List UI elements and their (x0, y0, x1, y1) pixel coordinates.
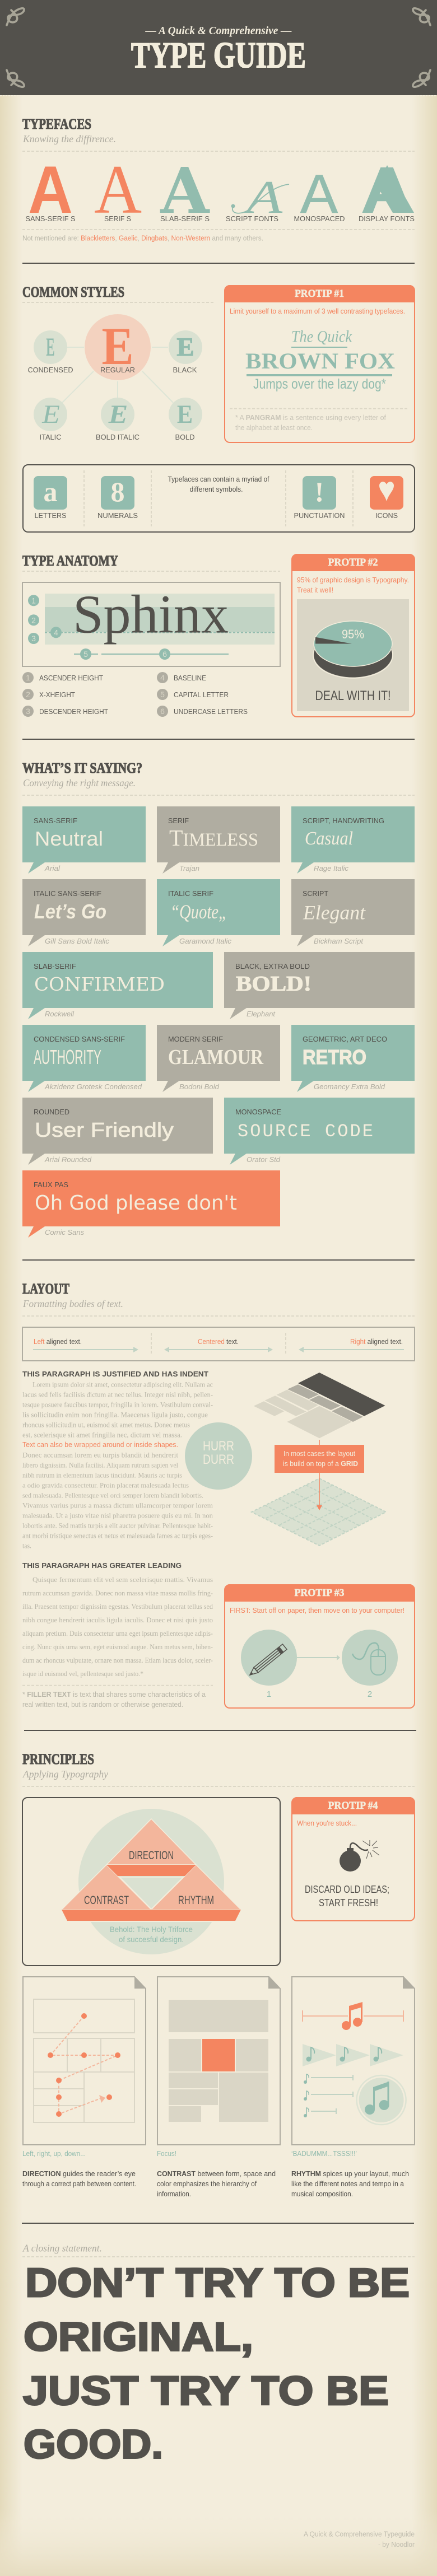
icon: mouse (342, 1630, 398, 1686)
eye path (48, 2013, 120, 2117)
protip 4 message (305, 1884, 389, 1908)
card: timeless: SERIF (168, 816, 189, 825)
protip 3 title: PROTIP #3 (295, 1587, 344, 1599)
card: neutral: SANS-SERIF (34, 816, 77, 825)
typeface labels: SERIF S (104, 214, 131, 223)
card: user friendly: User Friendly (35, 1118, 174, 1141)
style: bold italic (96, 398, 140, 441)
subheading: formatting bodies of text: Formatting bodies of text. (22, 1298, 123, 1309)
header subtitle: — A Quick & Comprehensive — (145, 25, 291, 37)
style: bold: E (177, 399, 193, 429)
style: italic: E (41, 399, 60, 428)
symbols description: different symbols. (189, 485, 243, 493)
letter samples row (28, 151, 414, 230)
page captions: Focus! (157, 2149, 176, 2158)
anatomy legend: 3 (26, 707, 30, 716)
filler text note: real written text, but is random or otherwise generated. (22, 1700, 183, 1709)
pangram lockup: Jumps over the lazy dog* (253, 376, 386, 392)
panel: protip 4 (292, 1797, 415, 1921)
card: user friendly: Arial Rounded (44, 1155, 92, 1164)
sphinx diagram: 1 (31, 596, 36, 605)
card: source code: MONOSPACE (235, 1108, 281, 1116)
card: authority: CONDENSED SANS-SERIF (34, 1035, 125, 1043)
protip 1 text: Limit yourself to a maximum of 3 well contrasting typefaces. (230, 307, 405, 315)
alignment panel: Centered text. (198, 1337, 239, 1346)
text: rhythm: musical composition. (291, 2190, 353, 2198)
protip 2 text: 95% of graphic design is Typography. (297, 576, 409, 584)
step numbers: 2 (368, 1690, 372, 1699)
symbol: icons (370, 476, 403, 520)
justified paragraph: malesuada. Ut a justo vitae nisl pharetra posuere quis eu mi. In non (22, 1511, 213, 1520)
pie chart card: 95% (342, 627, 364, 641)
greater leading paragraph: dum ac rhoncus vulputate, ornare non massa. Etiam lacus dolor, sceler- (22, 1656, 213, 1664)
symbol: punctuation: ! (315, 476, 324, 507)
anatomy legend: BASELINE (174, 674, 206, 682)
symbol: punctuation: PUNCTUATION (294, 511, 345, 520)
callout: grid (275, 1445, 364, 1473)
symbols description: Typefaces can contain a myriad of (168, 475, 269, 483)
triforce caption: of succesful design. (119, 1935, 184, 1944)
justified paragraph: libero dignissim. Nulla facilisi. Aliquam rutrum sapien vel (22, 1461, 178, 1469)
header banner (0, 0, 437, 96)
heading: typefaces: TYPEFACES (22, 116, 91, 132)
footer credit: - by Noodlor (378, 2541, 415, 2549)
card: let's go: Gill Sans Bold Italic (45, 937, 110, 945)
symbol: letters: LETTERS (35, 511, 67, 520)
closing quote: ORIGINAL, (24, 2315, 253, 2360)
symbol: icons: ICONS (375, 511, 398, 520)
style: regular (85, 314, 151, 380)
triforce labels: RHYTHM (178, 1894, 214, 1907)
card: casual: Rage Italic (314, 864, 349, 872)
card: elegant: SCRIPT (303, 889, 328, 898)
symbol: punctuation (294, 476, 345, 520)
arrow: paper to computer (297, 1655, 340, 1660)
style: black (169, 330, 202, 374)
style: bold italic: E (108, 399, 128, 428)
subheading: applying typography: Applying Typography (22, 1768, 108, 1780)
justified paragraph: est, scelerisque sit amet fringilla nec, dictum vel massa. (22, 1431, 182, 1439)
page captions (22, 2149, 357, 2158)
card: bold: Elephant (247, 1010, 276, 1018)
heading: type anatomy: TYPE ANATOMY (22, 553, 118, 569)
symbol: letters: a (44, 476, 57, 507)
typeface labels: SLAB-SERIF S (160, 214, 210, 223)
style: italic: ITALIC (39, 433, 62, 441)
greater leading paragraph: aliquam pretium. Duis consectetur urna eget ipsum pellentesque adipis- (22, 1629, 213, 1637)
style: black: E (176, 333, 194, 362)
page: direction (23, 1977, 146, 2145)
justified paragraph: tas. (22, 1542, 31, 1550)
symbol: numerals: 8 (111, 476, 124, 507)
style: italic (34, 398, 67, 441)
pangram lockup: BROWN FOX (245, 348, 395, 374)
alignment panel: Left aligned text. (34, 1337, 82, 1346)
text: rhythm (291, 2169, 409, 2198)
card: casual: Casual (305, 828, 353, 849)
justified paragraph: Lorem ipsum dolor sit amet, consectetur adipiscing elit. Nullam ac (32, 1380, 213, 1389)
protip 4 message: START FRESH! (319, 1897, 378, 1908)
justified paragraph: rhoncus sollicitudin ut, euismod sit amet metus. Donec metus (22, 1421, 190, 1429)
anatomy legend: 4 (160, 673, 165, 682)
style: black: BLACK (173, 366, 197, 374)
justified paragraph: tesque posuere faucibus tempor, fringilla in lorem. Vestibulum conval- (22, 1401, 213, 1409)
note durations (304, 2074, 353, 2117)
filler text note: * FILLER TEXT is text that shares some characteristics of a (22, 1690, 206, 1698)
pangram note (235, 414, 387, 432)
alignment panel (22, 1327, 415, 1361)
anatomy legend: 2 (26, 690, 30, 699)
subheading: conveying the right message: Conveying the right message. (23, 777, 136, 788)
typeface labels: SCRIPT FONTS (226, 214, 278, 223)
card: let's go: ITALIC SANS-SERIF (34, 889, 101, 898)
card: faux pas: Oh God please don't (35, 1192, 237, 1215)
style: bold (169, 398, 202, 441)
style: regular: REGULAR (100, 366, 135, 374)
style: condensed: CONDENSED (28, 366, 73, 374)
page captions: Left, right, up, down... (22, 2149, 86, 2158)
card: elegant: Bickham Script (314, 937, 364, 945)
justified paragraph (22, 1370, 213, 1550)
triforce labels: DIRECTION (129, 1849, 174, 1862)
triforce labels (84, 1849, 214, 1907)
protip 3 text: FIRST: Start off on paper, then move on to your computer! (230, 1607, 405, 1614)
letter samples row: A (28, 153, 73, 227)
card: bold: BLACK, EXTRA BOLD (235, 962, 310, 970)
card: elegant: Elegant (303, 902, 366, 924)
triforce caption (110, 1925, 193, 1944)
triforce labels: CONTRAST (84, 1894, 129, 1907)
pie chart card (297, 599, 409, 711)
step numbers: 1 (267, 1690, 271, 1699)
justified paragraph: Donec accumsan lorem eu turpis blandit id hendrerit (22, 1451, 178, 1459)
card: confirmed: Rockwell (45, 1010, 75, 1018)
protip 4 text: When you're stuck... (297, 1819, 357, 1827)
heading: principles: PRINCIPLES (22, 1751, 94, 1767)
sphinx diagram (22, 582, 280, 666)
typeface labels: MONOSPACED (294, 214, 345, 223)
card: retro: Geomancy Extra Bold (314, 1082, 385, 1091)
title: TYPE GUIDE (131, 35, 306, 76)
alignment panel: Right aligned text. (350, 1337, 403, 1346)
triangle notes (303, 2044, 403, 2066)
subheading: knowing the difference: Knowing the diffirence. (22, 133, 116, 144)
card: retro: RETRO (303, 1046, 366, 1068)
card: confirmed: SLAB-SERIF (34, 962, 76, 970)
style: regular: E (101, 316, 134, 376)
card: source code (224, 1098, 415, 1165)
symbol: numerals: NUMERALS (97, 511, 138, 520)
text: direction: through a correct path between content. (22, 2180, 136, 2188)
card: quote: Garamond Italic (179, 937, 232, 945)
card: casual: SCRIPT, HANDWRITING (303, 816, 384, 825)
typeface labels: DISPLAY FONTS (359, 214, 415, 223)
callout: grid: In most cases the layout (283, 1449, 355, 1458)
triforce caption: Behold: The Holy Triforce (110, 1925, 193, 1934)
card: bold (224, 952, 415, 1019)
card: confirmed: CONFIRMED (34, 973, 165, 995)
page captions: ‘BADUMMM...TSSS!!!’ (291, 2149, 357, 2158)
beat line (303, 2010, 403, 2022)
card: glamour: MODERN SERIF (168, 1035, 223, 1043)
closing quote: DON’T TRY TO BE (25, 2261, 410, 2306)
sphinx diagram: 2 (31, 615, 36, 624)
panel: triforce (22, 1798, 280, 1966)
anatomy legend: DESCENDER HEIGHT (39, 707, 108, 716)
symbol: numerals (97, 476, 138, 520)
heading: what's it saying: WHAT’S IT SAYING? (22, 760, 142, 776)
panel: symbols (23, 465, 415, 532)
symbol: letters (34, 476, 67, 520)
justified paragraph: lobortis ante. Sed mattis turpis a elit auctor pulvinar. Pellentesque habit- (22, 1522, 213, 1530)
card: faux pas (22, 1170, 280, 1238)
card: user friendly: ROUNDED (34, 1108, 69, 1116)
text: contrast: information. (157, 2190, 191, 2198)
icon: pencil (241, 1630, 297, 1686)
card: neutral (22, 806, 146, 874)
page: contrast (157, 1977, 280, 2145)
justified paragraph: Text can also be wrapped around or inside shapes. (22, 1440, 178, 1449)
sphinx diagram: 5 (83, 650, 88, 659)
protip 2 text (297, 576, 409, 594)
letter samples row: A (160, 155, 211, 228)
greater leading paragraph: Quisque fermentum elit vel sem scelerisque mattis. Vivamus (32, 1575, 213, 1584)
greater leading paragraph: isque id euismod vel, pellentesque sed justo.* (22, 1669, 143, 1678)
justified paragraph: lacus sed felis facilisis dictum at nec tellus. Integer nisl nibh, pellen- (22, 1390, 213, 1399)
card: elegant (291, 879, 415, 946)
text: rhythm: like the different notes and tempo in a (291, 2180, 405, 2188)
circle: hurr durr: HURR (203, 1439, 234, 1454)
symbols description (168, 475, 269, 493)
pangram note: the alphabet at least once. (235, 424, 313, 432)
filler text note (22, 1690, 206, 1709)
text: rhythm: RHYTHM spices up your layout, much (291, 2169, 409, 2178)
card: authority: AUTHORITY (34, 1046, 101, 1068)
letter samples row: A (243, 171, 283, 223)
text: contrast: color emphasizes the hierarchy of (157, 2180, 257, 2188)
panel: protip 2 (292, 554, 415, 717)
justified paragraph: lis sollicitudin enim non fringilla. Maecenas ligula justo, congue (22, 1411, 208, 1419)
arrow: layout to grid (317, 1440, 322, 1510)
card: faux pas: Comic Sans (45, 1228, 84, 1236)
connector lines (62, 347, 173, 403)
justified paragraph: a odio gravida consectetur. Proin placerat malesuada lectus (22, 1481, 189, 1490)
card: let's go (22, 879, 146, 946)
card: source code: SOURCE CODE (238, 1121, 373, 1142)
card: authority: Akzidenz Grotesk Condensed (44, 1082, 142, 1091)
greater leading paragraph (22, 1561, 213, 1678)
card: authority (22, 1025, 146, 1092)
sphinx diagram: Sphinx (73, 584, 229, 645)
protip 2 text: Treat it well! (297, 586, 333, 594)
section: common styles (22, 284, 213, 441)
sphinx diagram: 6 (162, 650, 167, 659)
greater leading paragraph: rutrum accumsan gravida. Donec non massa vitae massa mollis fring- (22, 1589, 213, 1597)
card: user friendly (22, 1098, 213, 1165)
card: faux pas: FAUX PAS (34, 1180, 68, 1189)
ornament: corner flourishes (7, 8, 430, 87)
step numbers (267, 1690, 372, 1699)
justified paragraph: nibh rutrum in elementum lacus tincidunt. Mauris ac turpis (22, 1471, 182, 1480)
justified paragraph: sed malesuada. Pellentesque vel orci semper lorem blandit lobortis. (22, 1491, 203, 1500)
anatomy legend (22, 672, 248, 717)
closing quote (23, 2261, 410, 2467)
card: quote (157, 879, 280, 946)
card: neutral: Arial (44, 864, 61, 872)
greater leading paragraph: cing. Nunc quis urna sem, eget euismod augue. Nam metus sem, biben- (22, 1642, 213, 1651)
closing quote: JUST TRY TO BE (23, 2369, 389, 2414)
protip 1 title: PROTIP #1 (295, 288, 344, 300)
card: neutral: Neutral (35, 827, 103, 850)
typeface labels: SANS-SERIF S (26, 214, 76, 223)
card: quote: ITALIC SERIF (168, 889, 213, 898)
protip 4 title: PROTIP #4 (328, 1800, 378, 1812)
card: let's go: Let’s Go (34, 900, 106, 923)
anatomy legend: ASCENDER HEIGHT (39, 674, 103, 682)
heading: common styles: COMMON STYLES (22, 284, 124, 300)
pie chart card: DEAL WITH IT! (315, 688, 391, 703)
greater leading paragraph: THIS PARAGRAPH HAS GREATER LEADING (22, 1561, 182, 1570)
closing subheading: A closing statement. (22, 2242, 102, 2253)
style: condensed: E (46, 333, 55, 362)
icon: orange notes (342, 2002, 362, 2030)
letter samples row: A (94, 151, 142, 228)
protip 4 message: DISCARD OLD IDEAS; (305, 1884, 389, 1895)
anatomy legend: CAPITAL LETTER (174, 690, 229, 699)
text: direction: DIRECTION guides the reader’s eye (22, 2169, 136, 2178)
card: quote: “Quote„ (170, 900, 227, 923)
protip 2 title: PROTIP #2 (328, 557, 378, 568)
sphinx diagram: 4 (54, 628, 58, 637)
section: principles (22, 1751, 415, 2198)
section: closing statement (22, 2242, 415, 2549)
text: contrast: CONTRAST between form, space and (157, 2169, 276, 2178)
anatomy legend: 5 (160, 690, 165, 699)
card: source code: Orator Std (247, 1155, 281, 1164)
card: timeless (157, 806, 280, 874)
panel: protip 3 (225, 1584, 415, 1708)
icon: bomb (340, 1840, 379, 1872)
sphinx diagram: 3 (31, 634, 36, 643)
callout: grid: is build on top of a GRID (283, 1459, 358, 1468)
greater leading paragraph: nibh congue hendrerit iaculis ligula iaculis. Donec et nisi quis justo (22, 1616, 213, 1624)
card: retro (291, 1025, 415, 1092)
justified paragraph: Vivamus varius purus a massa dictum ullamcorper tempor lorem (22, 1501, 213, 1510)
footer credit: A Quick & Comprehensive Typeguide (304, 2530, 415, 2538)
style: bold italic: BOLD ITALIC (96, 433, 140, 441)
text: direction (22, 2169, 136, 2188)
section: typefaces (22, 116, 415, 242)
card: timeless: Trajan (179, 864, 199, 872)
heading: layout: LAYOUT (22, 1281, 69, 1297)
card: confirmed (22, 952, 213, 1019)
section: layout (22, 1281, 415, 1709)
card: bold: BOLD! (236, 972, 312, 996)
icon: teal notes badge (357, 2075, 406, 2125)
anatomy legend: 6 (160, 707, 165, 716)
isometric layout blocks (254, 1373, 385, 1438)
pangram note: * A PANGRAM is a sentence using every letter of (235, 414, 387, 422)
panel: protip 1 (225, 285, 415, 442)
circle: hurr durr: DURR (203, 1452, 234, 1467)
footer credit (304, 2530, 415, 2549)
anatomy legend: X-XHEIGHT (39, 690, 75, 699)
pangram lockup: The Quick (291, 328, 352, 346)
note: not mentioned: Not mentioned are: Blackletters, Gaelic, Dingbats, Non-Western and many others. (22, 234, 263, 242)
text: contrast (157, 2169, 276, 2198)
triforce shape (62, 1819, 241, 1921)
card: casual (291, 806, 415, 874)
focus block (202, 2039, 235, 2071)
justified paragraph: THIS PARAGRAPH IS JUSTIFIED AND HAS INDENT (22, 1370, 208, 1378)
card: timeless: TIMELESS (169, 825, 258, 851)
pangram lockup (245, 328, 395, 392)
closing quote: GOOD. (24, 2422, 163, 2467)
card: glamour (157, 1025, 280, 1092)
card: glamour: Bodoni Bold (179, 1082, 220, 1091)
circle: hurr durr (185, 1422, 252, 1490)
isometric dashed grid (252, 1478, 386, 1546)
anatomy legend: UNDERCASE LETTERS (174, 707, 248, 716)
letter samples row: A (300, 165, 338, 230)
anatomy legend: 1 (26, 673, 30, 682)
card: retro: GEOMETRIC, ART DECO (303, 1035, 387, 1043)
justified paragraph: ant morbi tristique senectus et netus et malesuada fames ac turpis eges- (22, 1532, 213, 1540)
style: condensed (28, 330, 73, 374)
greater leading paragraph: illa. Praesent tempor dignissim egestas. Vestibulum placerat tellus sed (22, 1602, 213, 1611)
typeface labels (26, 214, 415, 223)
page: rhythm (292, 1977, 415, 2145)
section: what's it saying (22, 760, 415, 1238)
style: bold: BOLD (175, 433, 195, 441)
card: glamour: GLAMOUR (168, 1046, 263, 1069)
letter samples row: A (360, 153, 413, 227)
section: type anatomy (22, 553, 280, 717)
